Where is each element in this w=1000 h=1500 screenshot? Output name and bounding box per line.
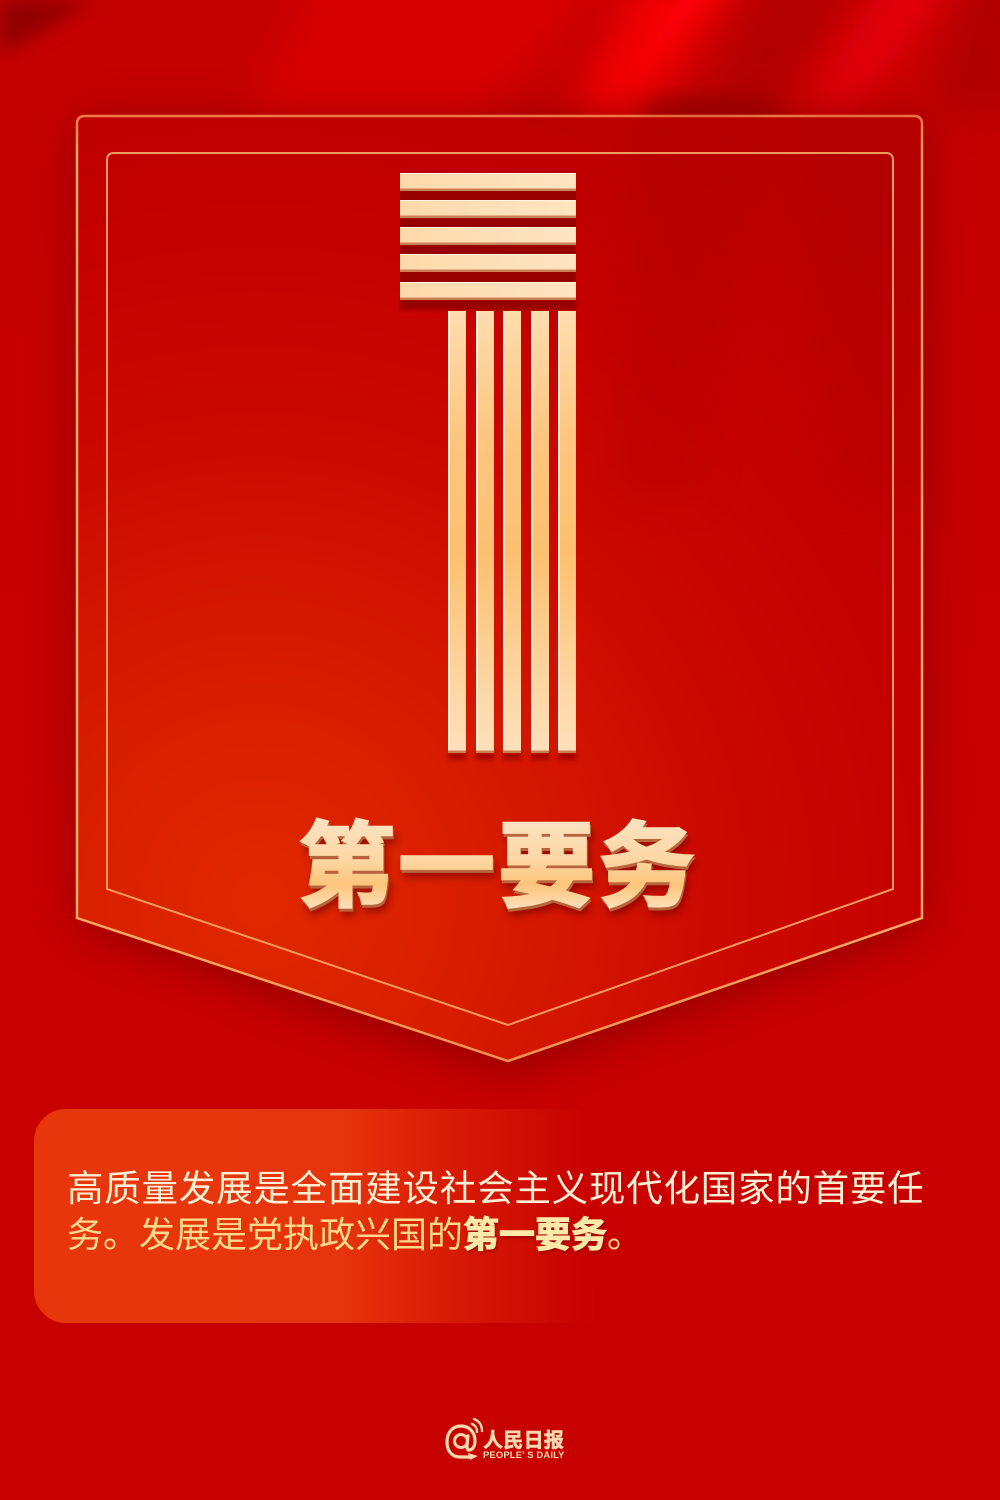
logo: People's Daily — [445, 1418, 565, 1461]
title: 第一要务 — [298, 816, 695, 920]
text block: description — [67, 1168, 924, 1255]
shield shadow — [78, 122, 922, 1072]
logo text: PEOPLE'S DAILY: PEOPLE' S DAILY — [483, 1450, 565, 1461]
logo text: 人民日报: 人民日报 — [483, 1430, 564, 1452]
text line 2: 务。发展是党执政兴国的第一要务。 — [67, 1214, 643, 1255]
text line 1: 高质量发展是全面建设社会主义现代化国家的首要任 — [67, 1168, 924, 1209]
icon: numeral one made of gold bars — [398, 173, 578, 762]
icon: at sign with signal arcs — [445, 1418, 484, 1460]
title: 第一要务 — [301, 823, 698, 927]
panel: description background — [34, 1109, 674, 1323]
title: 第一要务 — [299, 819, 696, 922]
